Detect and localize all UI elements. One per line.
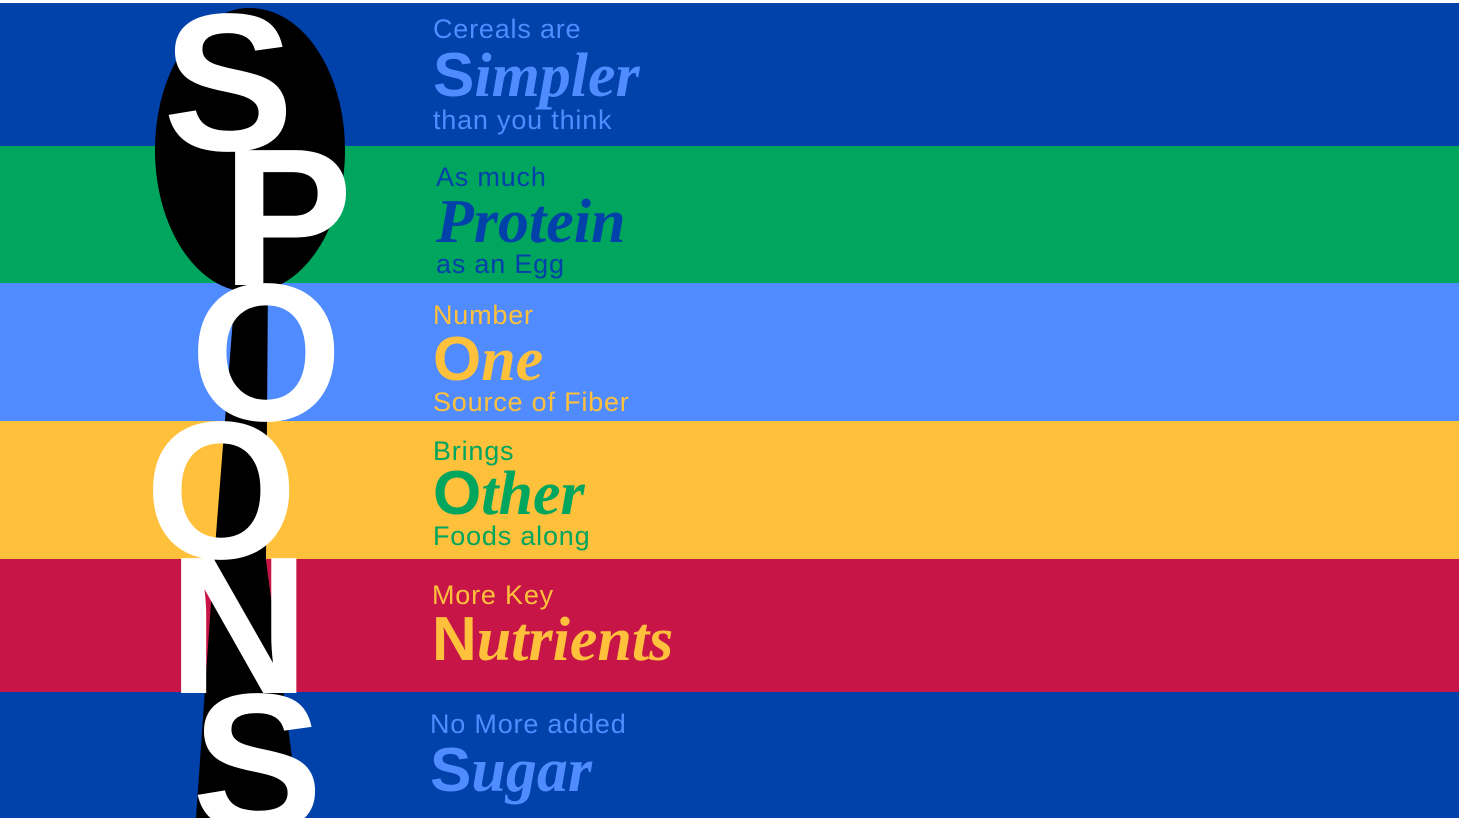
text: one: One xyxy=(433,325,543,394)
band: row 5 xyxy=(0,559,1459,692)
title: SPOONS: P xyxy=(222,108,353,327)
text: protein xyxy=(436,162,625,279)
title: SPOONS: N xyxy=(168,516,310,735)
title: SPOONS xyxy=(145,0,353,818)
text: sugar: Sugar xyxy=(430,736,592,805)
text: other: Foods along xyxy=(433,521,590,551)
text: simpler: than you think xyxy=(433,105,612,135)
band: row 2 xyxy=(0,146,1459,283)
band: row 1 xyxy=(0,3,1459,146)
text: simpler: Simpler xyxy=(433,41,640,110)
text: sugar: No More added xyxy=(430,709,627,739)
icon: spoon xyxy=(155,8,345,818)
title: SPOONS: O xyxy=(145,381,297,600)
text: protein: As much xyxy=(436,162,547,192)
text: one: Source of Fiber xyxy=(433,387,630,417)
text: other: Other xyxy=(433,459,585,528)
text: simpler: Cereals are xyxy=(433,14,581,44)
text: nutrients: Nutrients xyxy=(432,605,673,674)
text: other xyxy=(433,436,590,551)
text: nutrients: More Key xyxy=(432,580,554,610)
text: one xyxy=(433,300,630,417)
text: sugar xyxy=(430,709,627,805)
text: simpler xyxy=(433,14,640,135)
title: SPOONS: O xyxy=(190,243,342,462)
text: one: Number xyxy=(433,300,534,330)
text: protein: as an Egg xyxy=(436,249,565,279)
text: protein: Protein xyxy=(436,188,625,256)
text: other: Brings xyxy=(433,436,514,466)
band: row 4 xyxy=(0,421,1459,559)
band: row 3 xyxy=(0,283,1459,421)
band: row 6 xyxy=(0,692,1459,818)
